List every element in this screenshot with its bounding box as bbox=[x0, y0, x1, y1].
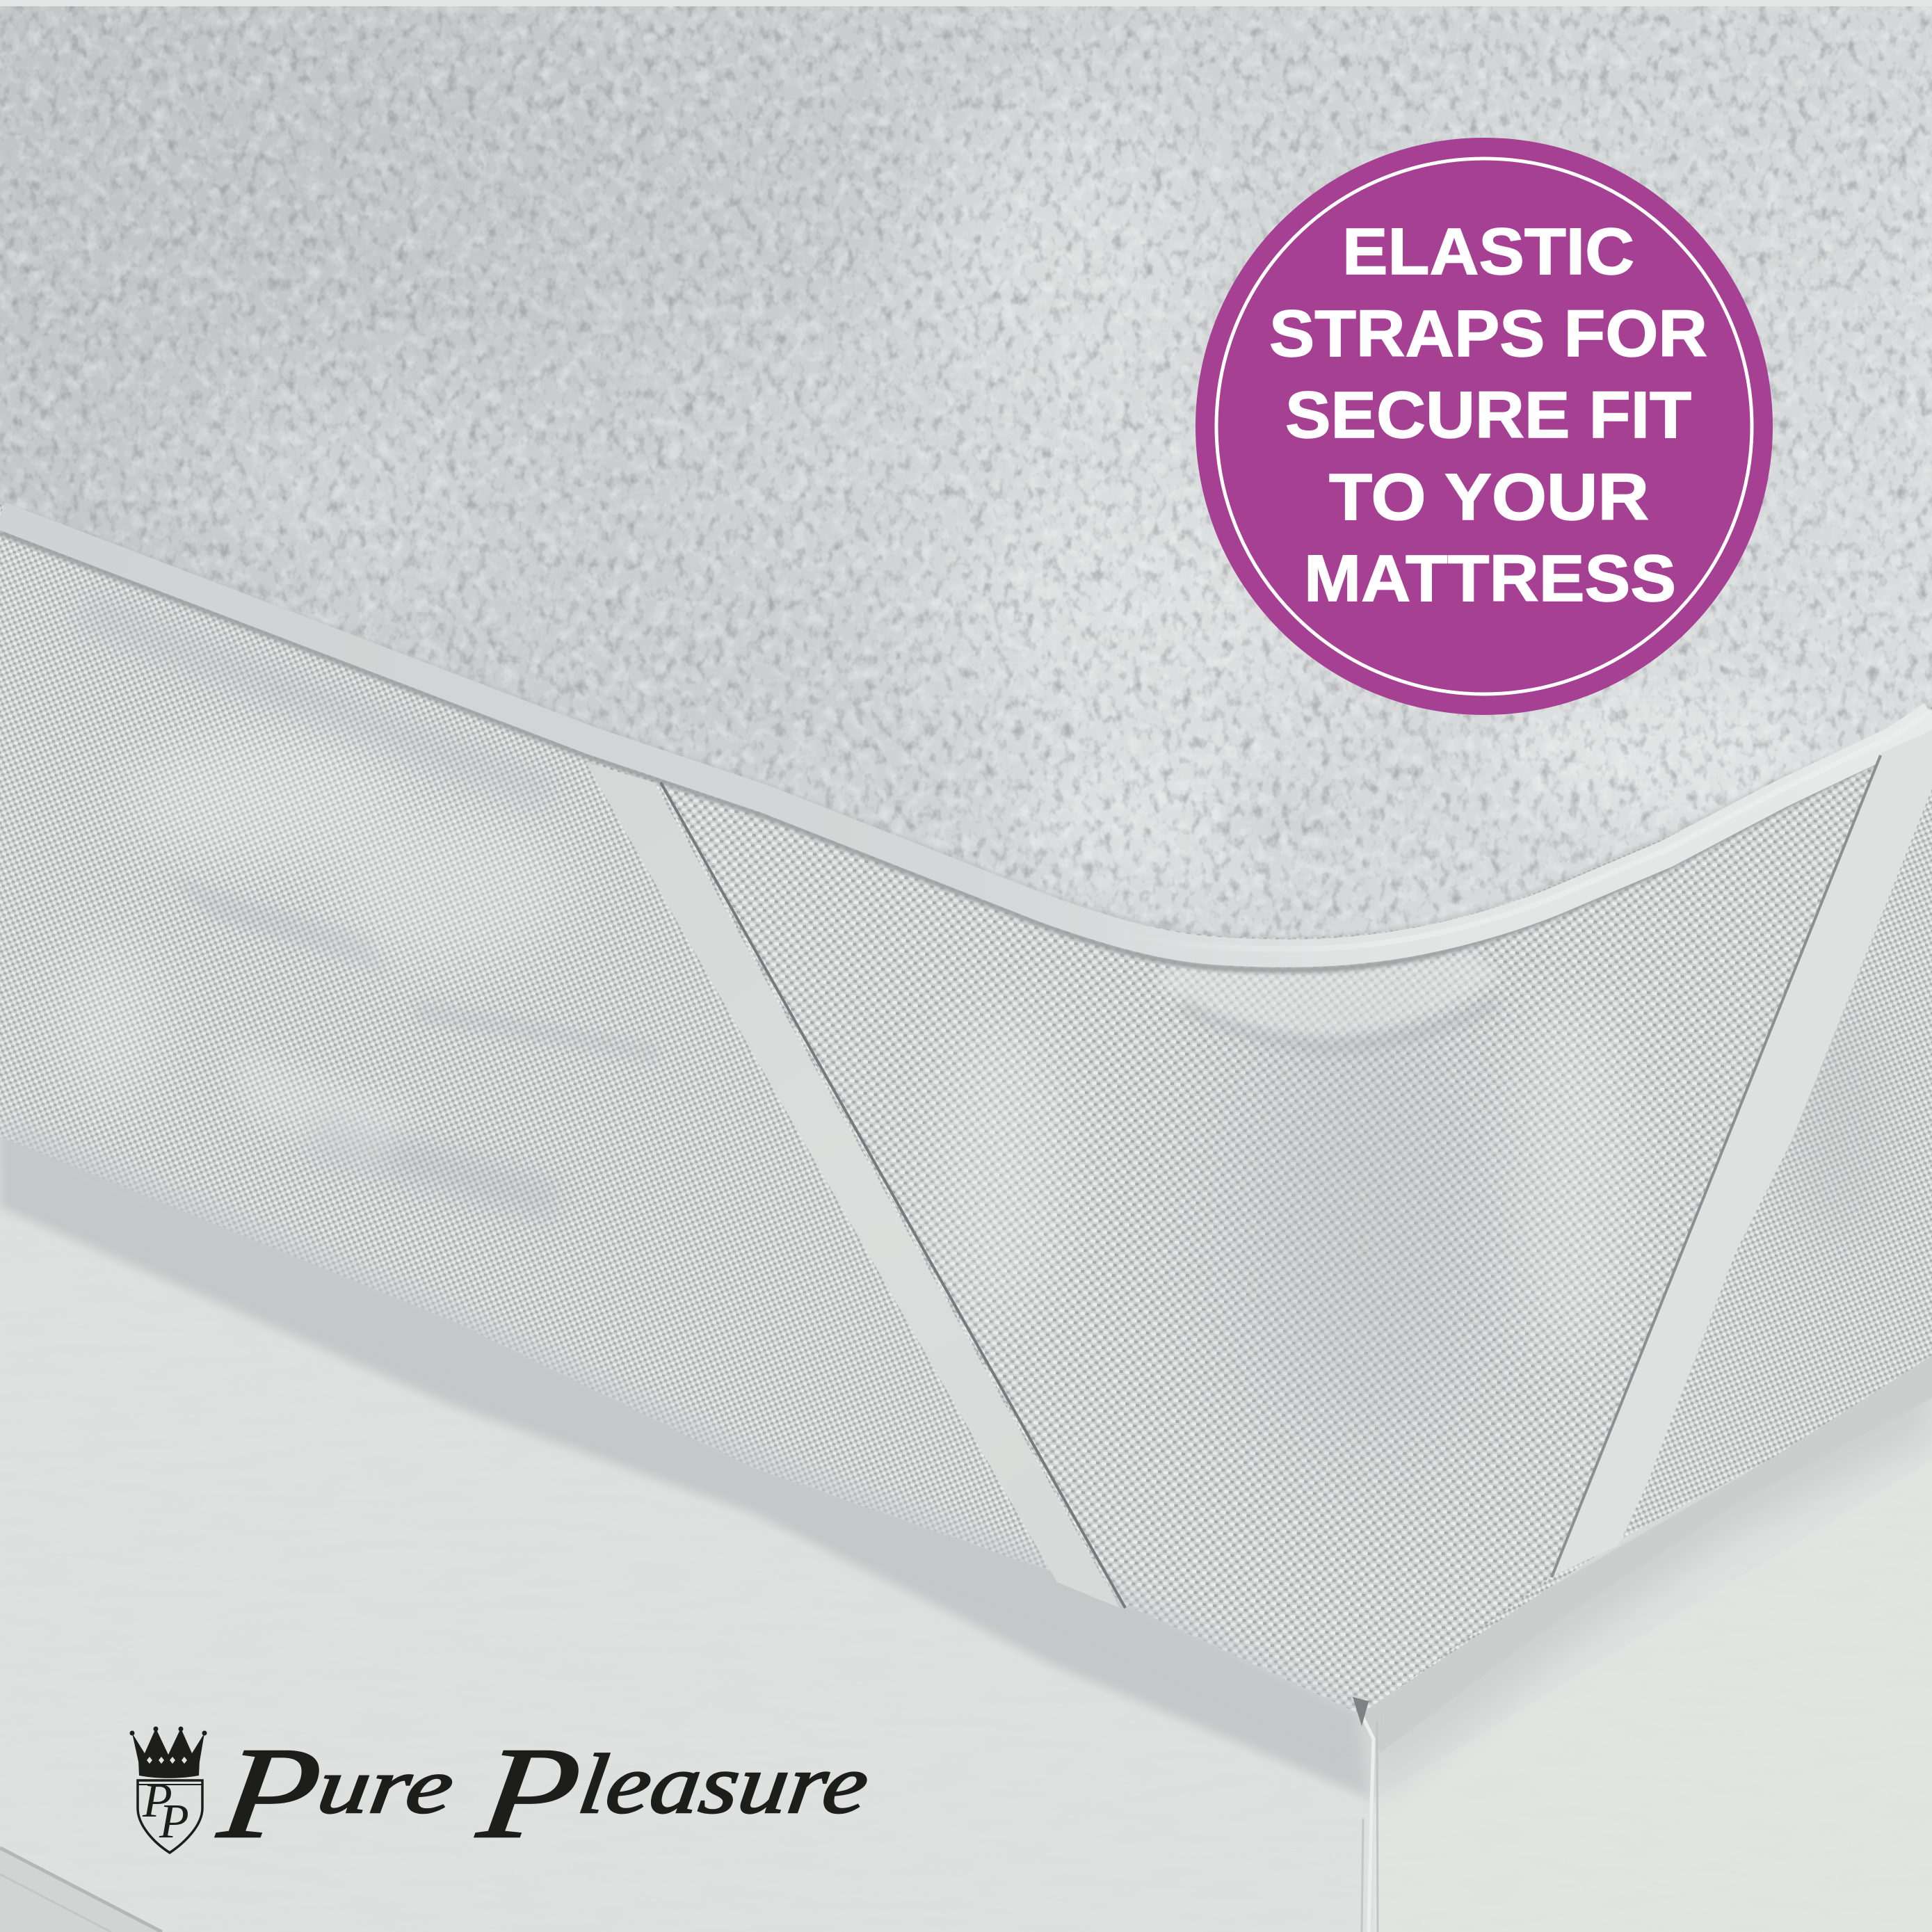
panel: soft fade of mesh into shadow band bbox=[0, 1120, 1360, 1732]
badge text: ELASTIC bbox=[1342, 215, 1634, 289]
logo wordmark: P bbox=[470, 1721, 589, 1865]
badge text: TO YOUR bbox=[1329, 460, 1649, 534]
badge: elastic straps callout bbox=[1196, 138, 1773, 715]
panel: shadow band under mattress topper bbox=[0, 1127, 1932, 1802]
logo wordmark: P bbox=[211, 1721, 330, 1865]
panel: mesh side fabric bbox=[0, 452, 1932, 1739]
icon: shield with PP monogram bbox=[138, 1774, 202, 1853]
panel: piping edge of topper bbox=[0, 502, 1932, 970]
icon: shield with PP monogram: P bbox=[159, 1795, 189, 1849]
badge text bbox=[1269, 215, 1707, 615]
logo wordmark: ure bbox=[312, 1741, 459, 1830]
jacquard shading on the mesh bbox=[63, 591, 1885, 1460]
panel: right elastic strap bbox=[1552, 730, 1932, 1577]
terry tonal blotches bbox=[943, 122, 1772, 874]
panel: corner seam of box bbox=[1353, 1697, 1378, 1932]
panel: left elastic strap bbox=[586, 762, 1125, 1608]
panel: terry towelling top surface bbox=[0, 0, 1932, 988]
logo wordmark bbox=[211, 1721, 877, 1865]
logo: Pure Pleasure bbox=[129, 1721, 877, 1865]
badge text: MATTRESS bbox=[1304, 542, 1676, 615]
panel: corner of lower mattress at bottom left bbox=[0, 1848, 162, 1932]
icon: crown bbox=[129, 1726, 207, 1778]
logo wordmark: leasure bbox=[573, 1737, 874, 1831]
badge text: SECURE FIT bbox=[1285, 378, 1691, 452]
badge text: STRAPS FOR bbox=[1269, 297, 1707, 371]
icon: shield with PP monogram: P bbox=[142, 1774, 172, 1828]
